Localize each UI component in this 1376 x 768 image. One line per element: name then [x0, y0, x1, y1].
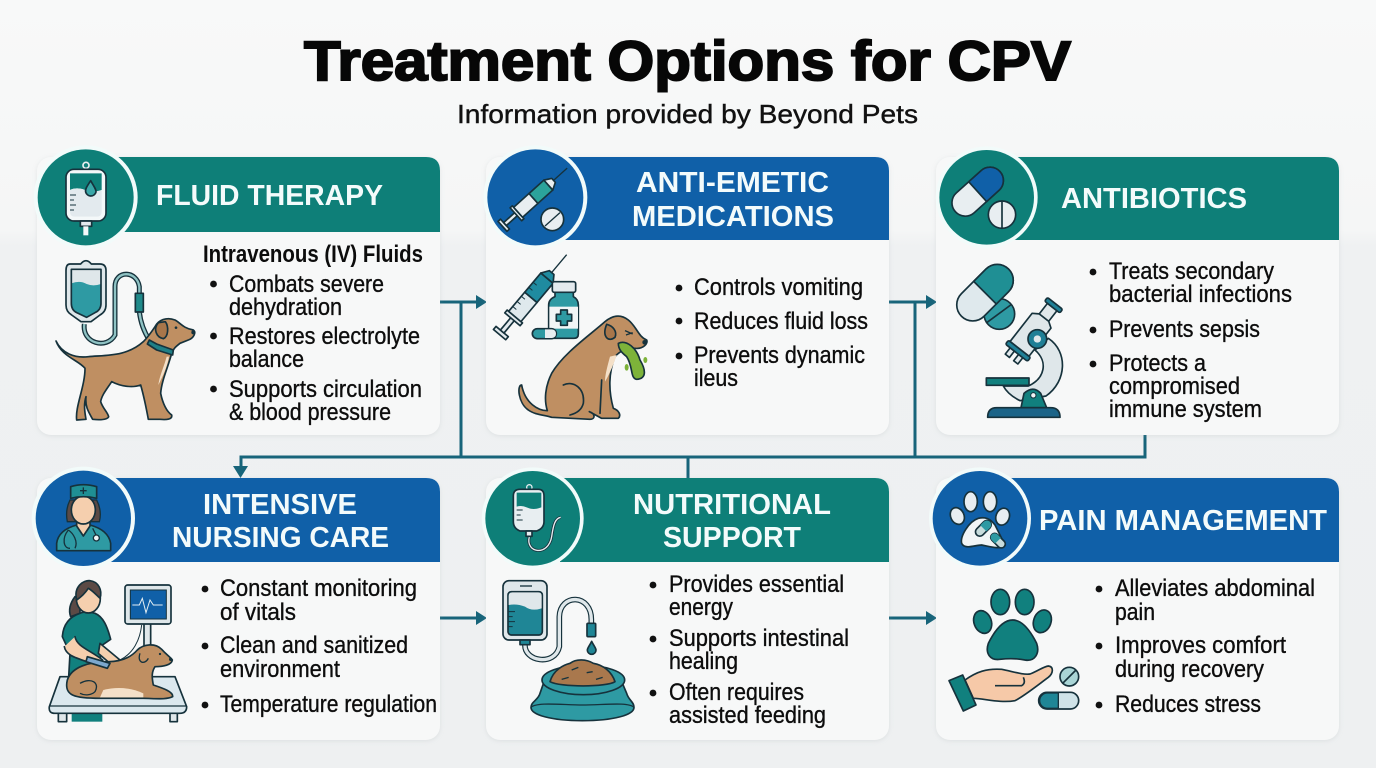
connector arrows between panels	[233, 295, 1145, 625]
text block: intensive nursing care	[202, 575, 437, 718]
text block: antibiotics: Treats secondary	[1109, 258, 1274, 285]
icon: feeding bag badge	[482, 467, 584, 569]
text block: fluid therapy: Supports circulation	[229, 376, 422, 403]
heading: pain management: PAIN MANAGEMENT	[1039, 505, 1327, 537]
heading: anti-emetic medications	[632, 167, 834, 233]
icon: IV bag badge	[34, 145, 138, 249]
text block: pain management: Alleviates abdominal	[1115, 575, 1315, 602]
icon: syringe and tablet badge	[483, 145, 587, 249]
text block: fluid therapy: & blood pressure	[229, 399, 391, 426]
header: fluid therapy	[110, 157, 440, 232]
text block: fluid therapy: Intravenous (IV) Fluids	[203, 241, 423, 268]
text block: fluid therapy: Restores electrolyte	[229, 323, 420, 350]
panel: pain management	[929, 467, 1339, 740]
text block: nutritional support: Supports intestinal	[669, 625, 849, 652]
text block: nutritional support: energy	[669, 594, 733, 621]
title: Treatment Options for CPV	[304, 29, 1071, 92]
text block: intensive nursing care: Constant monitoring	[220, 575, 417, 602]
text block: anti-emetic medications: Prevents dynamic	[694, 342, 865, 369]
illustration: feeding bag and bowl	[503, 581, 634, 721]
text block: intensive nursing care: environment	[220, 656, 340, 683]
illustration: nurse monitoring dog	[49, 581, 187, 722]
heading: nutritional support: SUPPORT	[663, 522, 801, 554]
text block: antibiotics	[1090, 258, 1292, 423]
text block: nutritional support: Often requires	[669, 679, 804, 706]
text block: anti-emetic medications	[676, 274, 868, 392]
text block: pain management: Reduces stress	[1115, 691, 1261, 718]
heading: intensive nursing care	[172, 489, 389, 554]
heading: antibiotics: ANTIBIOTICS	[1061, 183, 1247, 215]
icon: capsule and tablet badge	[936, 146, 1038, 248]
text block: pain management: pain	[1115, 599, 1155, 626]
text block: nutritional support: Provides essential	[669, 571, 844, 598]
text block: fluid therapy: dehydration	[229, 294, 342, 321]
header: antibiotics	[1010, 157, 1339, 240]
icon: nurse badge	[32, 467, 135, 570]
heading: intensive nursing care: INTENSIVE	[203, 489, 357, 521]
text block: intensive nursing care: Temperature regulation	[220, 691, 437, 718]
heading: nutritional support: NUTRITIONAL	[633, 489, 831, 521]
illustration: capsule and microscope	[950, 258, 1066, 417]
heading: intensive nursing care: NURSING CARE	[172, 522, 389, 554]
text block: pain management	[1096, 575, 1315, 718]
text block: nutritional support	[650, 571, 849, 729]
header: pain management	[1005, 478, 1339, 562]
text block: fluid therapy	[203, 241, 423, 426]
illustration: dog with IV drip	[56, 261, 195, 420]
text block: antibiotics: Protects a	[1109, 350, 1207, 377]
panel: intensive nursing care	[32, 467, 440, 740]
heading: nutritional support	[633, 489, 831, 554]
illustration: paw over hand with pills	[949, 589, 1079, 711]
subtitle: Information provided by Beyond Pets	[457, 99, 918, 129]
header: intensive nursing care	[110, 478, 440, 562]
illustration: medicine and vomiting dog	[492, 248, 647, 419]
text block: pain management: Improves comfort	[1115, 632, 1286, 659]
text block: anti-emetic medications: Reduces fluid loss	[694, 308, 868, 335]
text block: nutritional support: assisted feeding	[669, 702, 826, 729]
heading: fluid therapy: FLUID THERAPY	[156, 180, 383, 212]
text block: anti-emetic medications: ileus	[694, 365, 738, 392]
icon: paw badge	[929, 467, 1031, 569]
panel: antibiotics	[936, 146, 1339, 435]
text block: intensive nursing care: Clean and sanitized	[220, 632, 408, 659]
panel: fluid therapy	[34, 145, 440, 435]
text block: antibiotics: compromised	[1109, 373, 1240, 400]
text block: fluid therapy: Combats severe	[229, 271, 384, 298]
header: anti-emetic medications	[560, 157, 889, 240]
text block: nutritional support: healing	[669, 648, 738, 675]
panel: anti-emetic medications	[483, 145, 889, 435]
text block: anti-emetic medications: Controls vomiting	[694, 274, 863, 301]
heading: anti-emetic medications: ANTI-EMETIC	[636, 167, 829, 199]
text block: fluid therapy: balance	[229, 346, 304, 373]
panel: nutritional support	[482, 467, 889, 740]
heading: anti-emetic medications: MEDICATIONS	[632, 201, 834, 233]
text block: pain management: during recovery	[1115, 656, 1264, 683]
header: nutritional support	[560, 478, 889, 562]
text block: intensive nursing care: of vitals	[220, 599, 296, 626]
text block: antibiotics: bacterial infections	[1109, 281, 1292, 308]
text block: antibiotics: Prevents sepsis	[1109, 316, 1260, 343]
text block: antibiotics: immune system	[1109, 396, 1262, 423]
